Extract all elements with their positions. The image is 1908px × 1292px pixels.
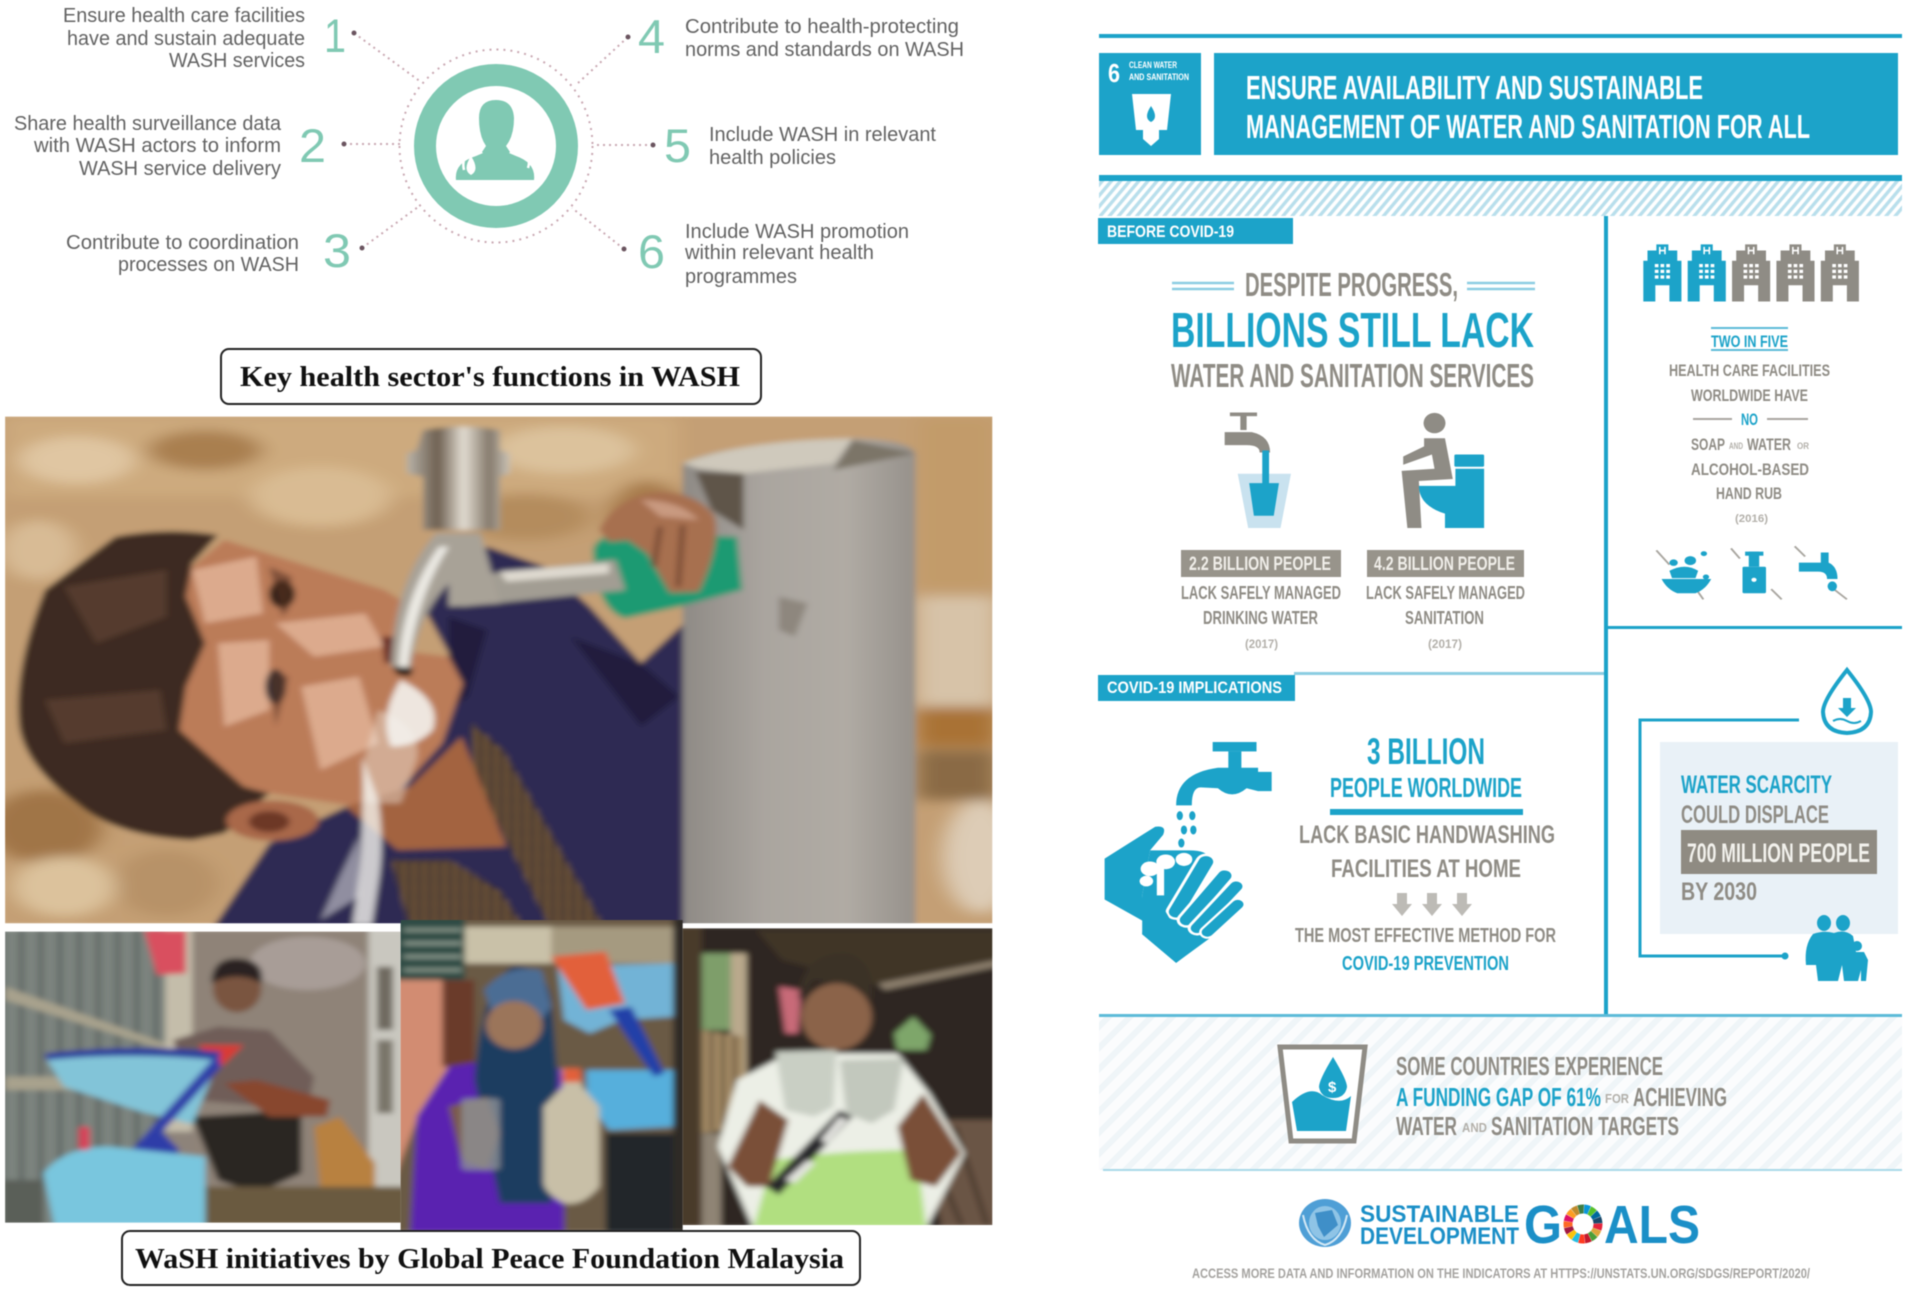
function 5: Include WASH in relevant <box>709 123 936 146</box>
headline: billions still lack <box>1171 266 1535 394</box>
function 3: 3 <box>323 224 351 277</box>
icon: family <box>1806 915 1868 981</box>
function 6: 6 <box>638 225 665 278</box>
icons: soap, hand rub, tap <box>1656 546 1847 599</box>
stat: 4.2 billion <box>1366 550 1525 651</box>
text: 3 billion: COVID-19 PREVENTION <box>1342 953 1509 975</box>
text: two in five: NO <box>1741 410 1758 429</box>
function 1: have and sustain adequate <box>67 27 305 50</box>
callout: water scarcity: WATER SCARCITY <box>1681 771 1832 799</box>
function 2: 2 <box>299 119 326 172</box>
function 1: WASH services <box>169 49 305 72</box>
function 6: within relevant health <box>684 241 874 264</box>
tag: before covid-19 <box>1098 218 1293 244</box>
stat: 4.2 billion: (2017) <box>1428 637 1462 651</box>
function 2: Share health surveillance data <box>14 112 282 135</box>
icon: UN emblem <box>1299 1199 1351 1247</box>
stat: 2.2 billion: 2.2 BILLION PEOPLE <box>1189 554 1331 575</box>
function 1: 1 <box>324 9 346 62</box>
text: funding gap: WATER <box>1396 1111 1457 1141</box>
function 1 <box>63 4 346 72</box>
stat: 2.2 billion: LACK SAFELY MANAGED <box>1181 583 1341 603</box>
icon: five hospital buildings <box>1643 244 1859 302</box>
text: 3 billion: FACILITIES AT HOME <box>1331 855 1521 883</box>
shirt <box>212 547 684 930</box>
icon: tap and glass <box>1225 412 1291 528</box>
text: two in five: HAND RUB <box>1716 484 1782 503</box>
text: two in five: TWO IN FIVE <box>1711 332 1788 351</box>
stat: 4.2 billion: 4.2 BILLION PEOPLE <box>1374 554 1515 575</box>
icon: glass with dollar drop: $ <box>1328 1079 1337 1096</box>
text: funding gap: ACHIEVING <box>1633 1082 1727 1112</box>
caption: WaSH initiatives: WaSH initiatives by Global Peace Foundation Malaysia <box>135 1244 844 1275</box>
SDG 6 badge: AND SANITATION <box>1129 72 1189 82</box>
text: two in five: (2016) <box>1735 513 1768 525</box>
function 5: 5 <box>664 119 691 172</box>
function 6 <box>638 220 909 288</box>
text: two in five <box>1669 328 1830 525</box>
panel: key health sector functions diagram <box>14 4 964 288</box>
hatched band <box>1099 181 1902 216</box>
text: two in five: HEALTH CARE FACILITIES <box>1669 361 1830 380</box>
function 3: Contribute to coordination <box>66 231 299 254</box>
text: funding gap: A FUNDING GAP OF 61% <box>1396 1082 1601 1112</box>
function 6: programmes <box>685 265 797 288</box>
text: two in five: WATER <box>1747 435 1791 454</box>
hair <box>18 531 269 840</box>
function 1: Ensure health care facilities <box>63 4 305 27</box>
function 4: Contribute to health-protecting <box>685 15 959 38</box>
caption: key health sector functions <box>221 349 761 404</box>
text: 3 billion: PEOPLE WORLDWIDE <box>1330 772 1522 803</box>
photo: man with water filter <box>0 928 410 1227</box>
text: 3 billion: LACK BASIC HANDWASHING <box>1299 821 1555 849</box>
stat: 2.2 billion <box>1181 550 1341 651</box>
caption: WaSH initiatives <box>122 1231 860 1285</box>
callout: water scarcity: BY 2030 <box>1681 878 1757 906</box>
stat: 4.2 billion: SANITATION <box>1405 608 1484 628</box>
function 3: processes on WASH <box>118 253 299 276</box>
SDG 6 badge: CLEAN WATER <box>1129 60 1177 70</box>
icon: hands washing under tap <box>1105 742 1272 963</box>
tag: covid-19 implications: COVID-19 IMPLICATIONS <box>1107 678 1282 697</box>
function 5 <box>664 119 936 172</box>
callout: water scarcity <box>1640 720 1898 960</box>
water stream <box>321 680 434 925</box>
logo: sustainable development goals: ALS <box>1604 1195 1700 1255</box>
central doctor icon <box>400 50 592 242</box>
logo: sustainable development goals: SUSTAINABLE <box>1360 1201 1519 1228</box>
text: 3 billion: THE MOST EFFECTIVE METHOD FOR <box>1295 925 1556 947</box>
SDG 6 badge <box>1099 53 1201 155</box>
text: 3 billion <box>1295 731 1556 975</box>
icon: person on toilet <box>1402 413 1484 528</box>
text: funding gap: FOR <box>1605 1091 1630 1106</box>
headline: billions still lack: WATER AND SANITATION SERVICES <box>1171 357 1534 394</box>
text: funding gap: SANITATION TARGETS <box>1491 1111 1679 1141</box>
text: funding gap <box>1396 1051 1727 1141</box>
headline: billions still lack: BILLIONS STILL LACK <box>1171 304 1534 358</box>
function 4: 4 <box>638 10 665 63</box>
ear <box>226 801 319 841</box>
text: two in five: SOAP <box>1691 435 1725 454</box>
photo: woman with bottle and filter <box>391 917 692 1233</box>
headline: billions still lack: DESPITE PROGRESS, <box>1245 266 1458 303</box>
function 4 <box>638 10 964 63</box>
function 6: Include WASH promotion <box>685 220 909 243</box>
photo: woman holding clean water glasses <box>673 925 1000 1228</box>
SDG 6 badge: 6 <box>1108 58 1120 88</box>
text: two in five: OR <box>1797 441 1809 451</box>
text: two in five: ALCOHOL-BASED <box>1691 460 1809 479</box>
logo: sustainable development goals: DEVELOPMENT <box>1360 1223 1519 1250</box>
function 5: health policies <box>709 146 836 169</box>
callout: water scarcity: COULD DISPLACE <box>1681 801 1829 829</box>
panel: funding gap <box>1099 1017 1902 1171</box>
concrete pipe <box>683 438 915 930</box>
text: 3 billion: 3 BILLION <box>1367 731 1485 772</box>
stat: 2.2 billion: DRINKING WATER <box>1203 608 1318 628</box>
function 4: norms and standards on WASH <box>685 38 964 61</box>
text: funding gap: AND <box>1462 1120 1487 1135</box>
text: two in five: AND <box>1729 441 1743 451</box>
icon: SDG colour wheel <box>1568 1209 1598 1239</box>
green fitting <box>593 533 742 618</box>
stat: 4.2 billion: LACK SAFELY MANAGED <box>1366 583 1525 603</box>
stat: 2.2 billion: (2017) <box>1245 637 1278 651</box>
photo: boy drinking from tap <box>0 413 1019 930</box>
chrome tap <box>462 560 625 607</box>
function 2: with WASH actors to inform <box>33 134 281 157</box>
tag: covid-19 implications <box>1098 675 1295 701</box>
logo: sustainable development goals <box>1299 1195 1700 1255</box>
logo: sustainable development goals: G <box>1524 1195 1562 1255</box>
dotted connector lines <box>344 33 653 249</box>
function 2 <box>14 112 326 180</box>
icon: glass with dollar drop <box>1280 1047 1365 1141</box>
face <box>176 540 468 807</box>
panel: SDG 6 infographic frame rules <box>1099 34 1902 1017</box>
caption: key health sector functions: Key health sector's functions in WASH <box>240 362 740 393</box>
text: funding gap: SOME COUNTRIES EXPERIENCE <box>1396 1051 1663 1081</box>
text: two in five: WORLDWIDE HAVE <box>1691 386 1808 405</box>
hand <box>599 492 716 593</box>
heading banner <box>1214 53 1898 155</box>
icon: water drop <box>1823 670 1871 733</box>
tag: before covid-19: BEFORE COVID-19 <box>1107 222 1234 241</box>
connector end dots <box>342 30 656 252</box>
function 3 <box>66 224 351 277</box>
function 2: WASH service delivery <box>79 157 282 180</box>
